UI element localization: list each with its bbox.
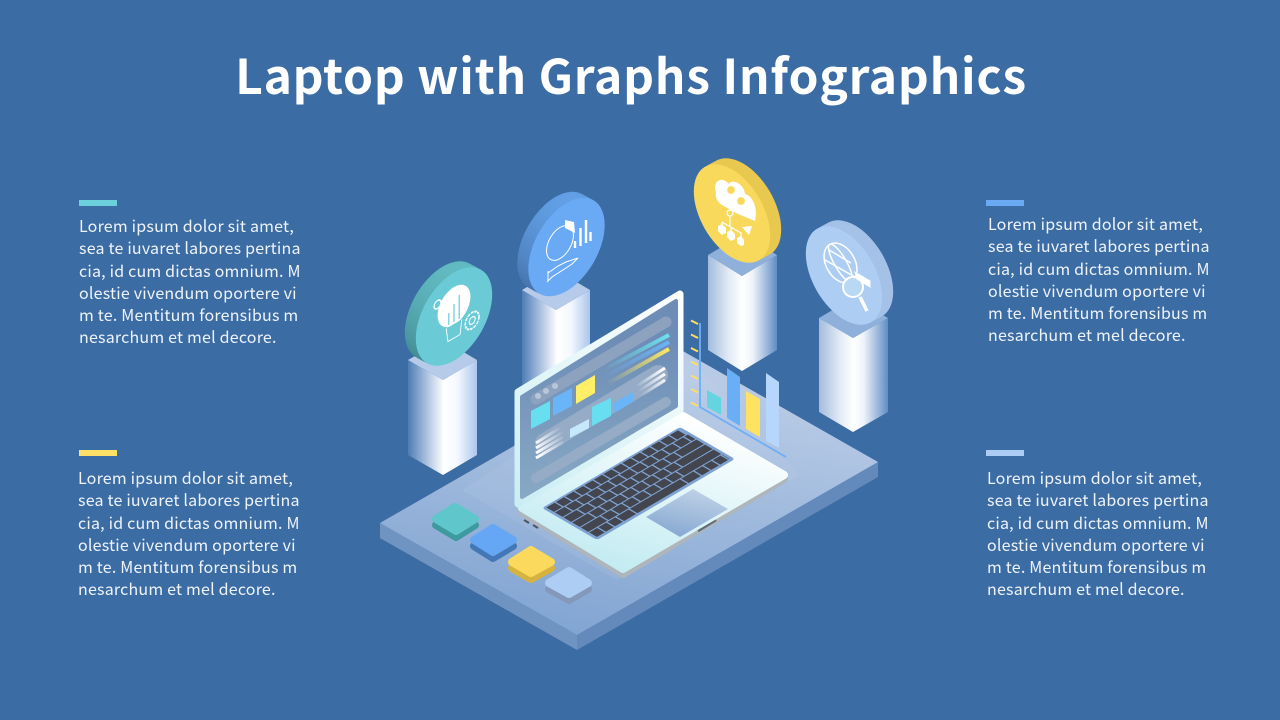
- icon: light bulb with gears: [434, 272, 479, 350]
- accent bar: bottom right: [986, 450, 1024, 456]
- icon: globe and magnifier: [817, 237, 870, 311]
- disc: blue with pie chart icon: [501, 179, 621, 309]
- laptop base edge: [522, 420, 784, 574]
- text block: top right: sea te iuvaret labores pertina: [988, 233, 1210, 257]
- keycap: blue: [474, 528, 513, 558]
- laptop: [518, 294, 784, 574]
- ui tiles: [531, 375, 633, 438]
- text block: bottom left: cia, id cum dictas omnium. M: [78, 510, 300, 534]
- text block: bottom right: [987, 465, 1209, 600]
- text block: bottom right: sea te iuvaret labores pertina: [987, 487, 1209, 511]
- laptop ports: [524, 520, 538, 528]
- text block: top left: nesarchum et mel decore.: [79, 324, 277, 348]
- pillar: teal: [408, 340, 477, 475]
- laptop base: [522, 416, 784, 569]
- bar: teal: [707, 390, 721, 415]
- disc: yellow with cloud network icon: [678, 145, 797, 276]
- icon: cloud and hierarchy: [715, 180, 756, 246]
- text block: top left: cia, id cum dictas omnium. M: [79, 258, 301, 282]
- bar chart: [691, 320, 786, 457]
- text block: top left: sea te iuvaret labores pertina: [79, 235, 301, 259]
- text block: bottom right: olestie vivendum oportere vi: [987, 532, 1205, 556]
- pillar: light blue: [819, 298, 888, 432]
- white text stripes: [536, 368, 665, 458]
- text block: top right: m te. Mentitum forensibus m: [988, 300, 1207, 324]
- accent bar: top left: [79, 200, 117, 206]
- text block: bottom left: nesarchum et mel decore.: [78, 576, 276, 600]
- keycap: yellow: [512, 550, 551, 579]
- pillar: blue: [522, 270, 590, 405]
- bar: blue: [727, 368, 740, 426]
- disc: teal with light bulb icon: [389, 248, 508, 379]
- laptop notch: [698, 520, 716, 531]
- chart tick marks: [691, 320, 698, 406]
- accent bar: top right: [986, 200, 1024, 206]
- text block: bottom right: nesarchum et mel decore.: [987, 576, 1185, 600]
- text block: bottom right: Lorem ipsum dolor sit amet,: [987, 465, 1202, 489]
- keycap: teal: [436, 507, 475, 537]
- chart axes: [700, 323, 786, 457]
- ui row: middle pill: [545, 375, 658, 443]
- text block: bottom right: m te. Mentitum forensibus m: [987, 554, 1206, 578]
- bar: light blue: [766, 373, 779, 448]
- text block: top left: olestie vivendum oportere vi: [79, 280, 297, 304]
- ui row: top bar with dots: [536, 322, 666, 399]
- colored stripes: [603, 335, 669, 384]
- pillar: yellow: [708, 235, 777, 371]
- text block: bottom left: Lorem ipsum dolor sit amet,: [78, 465, 293, 489]
- text block: top left: m te. Mentitum forensibus m: [79, 302, 298, 326]
- bar: yellow: [746, 391, 760, 437]
- text block: bottom left: sea te iuvaret labores pertina: [78, 487, 300, 511]
- text block: top right: nesarchum et mel decore.: [988, 322, 1186, 346]
- keycap: light blue: [549, 571, 588, 600]
- platform: [380, 350, 878, 650]
- ui row: bottom pill: [536, 402, 666, 478]
- text block: bottom left: olestie vivendum oportere vi: [78, 532, 296, 556]
- screen frame: [518, 294, 680, 504]
- text block: bottom right: cia, id cum dictas omnium. M: [987, 510, 1209, 534]
- text block: top left: [79, 213, 301, 348]
- text block: bottom left: m te. Mentitum forensibus m: [78, 554, 297, 578]
- window dots: [535, 383, 558, 399]
- icon: hand holding pie chart and bars: [541, 220, 590, 282]
- text block: top right: cia, id cum dictas omnium. M: [988, 256, 1210, 280]
- accent bar: bottom left: [79, 450, 117, 456]
- text block: top right: Lorem ipsum dolor sit amet,: [988, 211, 1203, 235]
- disc: light blue with globe icon: [790, 207, 909, 338]
- screen: [522, 301, 676, 497]
- keyboard: [542, 427, 735, 540]
- text block: top right: olestie vivendum oportere vi: [988, 278, 1206, 302]
- trackpad: [646, 489, 728, 537]
- text block: top right: [988, 211, 1210, 346]
- text block: bottom left: [78, 465, 300, 600]
- text block: top left: Lorem ipsum dolor sit amet,: [79, 213, 294, 237]
- title: Laptop with Graphs Infographics: [235, 38, 1027, 108]
